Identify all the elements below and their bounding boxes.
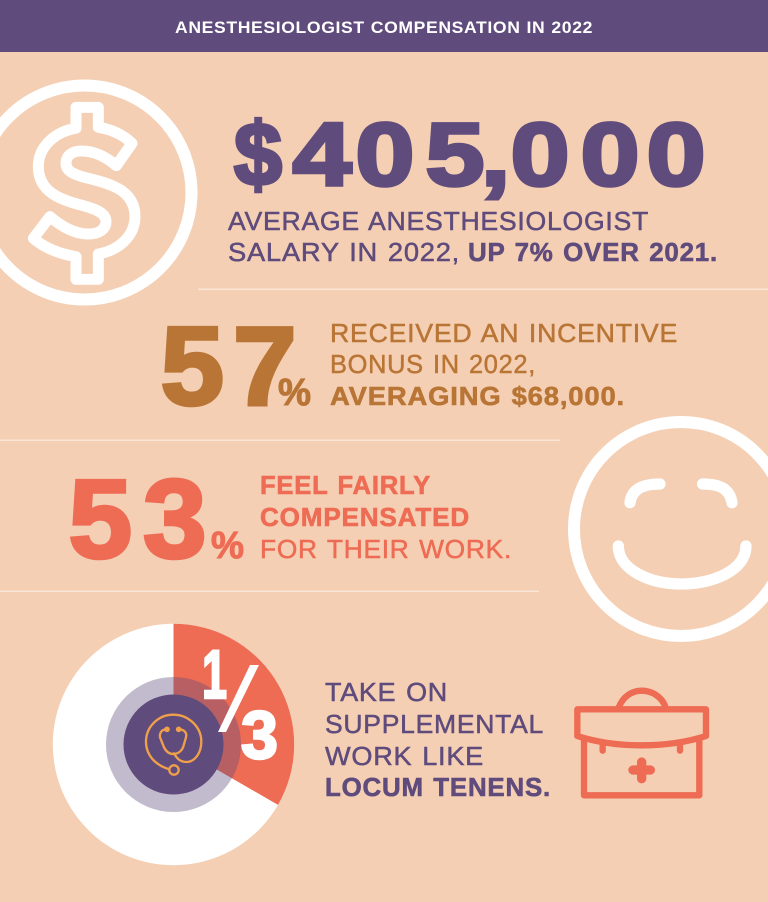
bonus description: AVERAGING $68,000. <box>330 381 625 411</box>
one third label: 3 <box>241 697 278 773</box>
fair compensation percentage: 53 <box>68 457 207 581</box>
salary description <box>228 206 718 267</box>
icon: dollar coin <box>0 86 192 300</box>
one third label <box>202 636 278 773</box>
supplemental work description: TAKE ON <box>325 677 448 707</box>
salary figure: $ <box>234 105 282 204</box>
header banner <box>0 0 768 52</box>
pie chart: one third <box>53 624 294 865</box>
header title: ANESTHESIOLOGIST COMPENSATION IN 2022 <box>175 18 593 37</box>
icon: stethoscope <box>146 715 201 775</box>
salary description: UP 7% OVER 2021. <box>468 237 718 267</box>
fair compensation percentage: % <box>211 525 244 567</box>
one third label: 1 <box>202 636 227 713</box>
fair compensation description: FEEL FAIRLY <box>260 470 431 500</box>
icon: smiley face <box>574 422 768 636</box>
salary description: SALARY IN 2022, <box>228 237 460 267</box>
bonus percentage: 57 <box>160 304 297 428</box>
supplemental work description: LOCUM TENENS. <box>325 772 551 802</box>
supplemental work description <box>325 677 551 802</box>
bonus description <box>330 318 678 411</box>
supplemental work description: SUPPLEMENTAL <box>325 709 544 739</box>
bonus description: BONUS IN 2022, <box>330 349 536 379</box>
salary description: AVERAGE ANESTHESIOLOGIST <box>228 206 649 236</box>
fair compensation description <box>260 470 512 564</box>
fair compensation description: COMPENSATED <box>260 502 470 532</box>
bonus description: RECEIVED AN INCENTIVE <box>330 318 678 348</box>
supplemental work description: WORK LIKE <box>325 741 484 771</box>
icon: medical briefcase <box>577 691 706 795</box>
salary figure: 405,000 <box>293 104 706 204</box>
bonus percentage: % <box>278 372 311 414</box>
fair compensation description: FOR THEIR WORK. <box>260 534 512 564</box>
